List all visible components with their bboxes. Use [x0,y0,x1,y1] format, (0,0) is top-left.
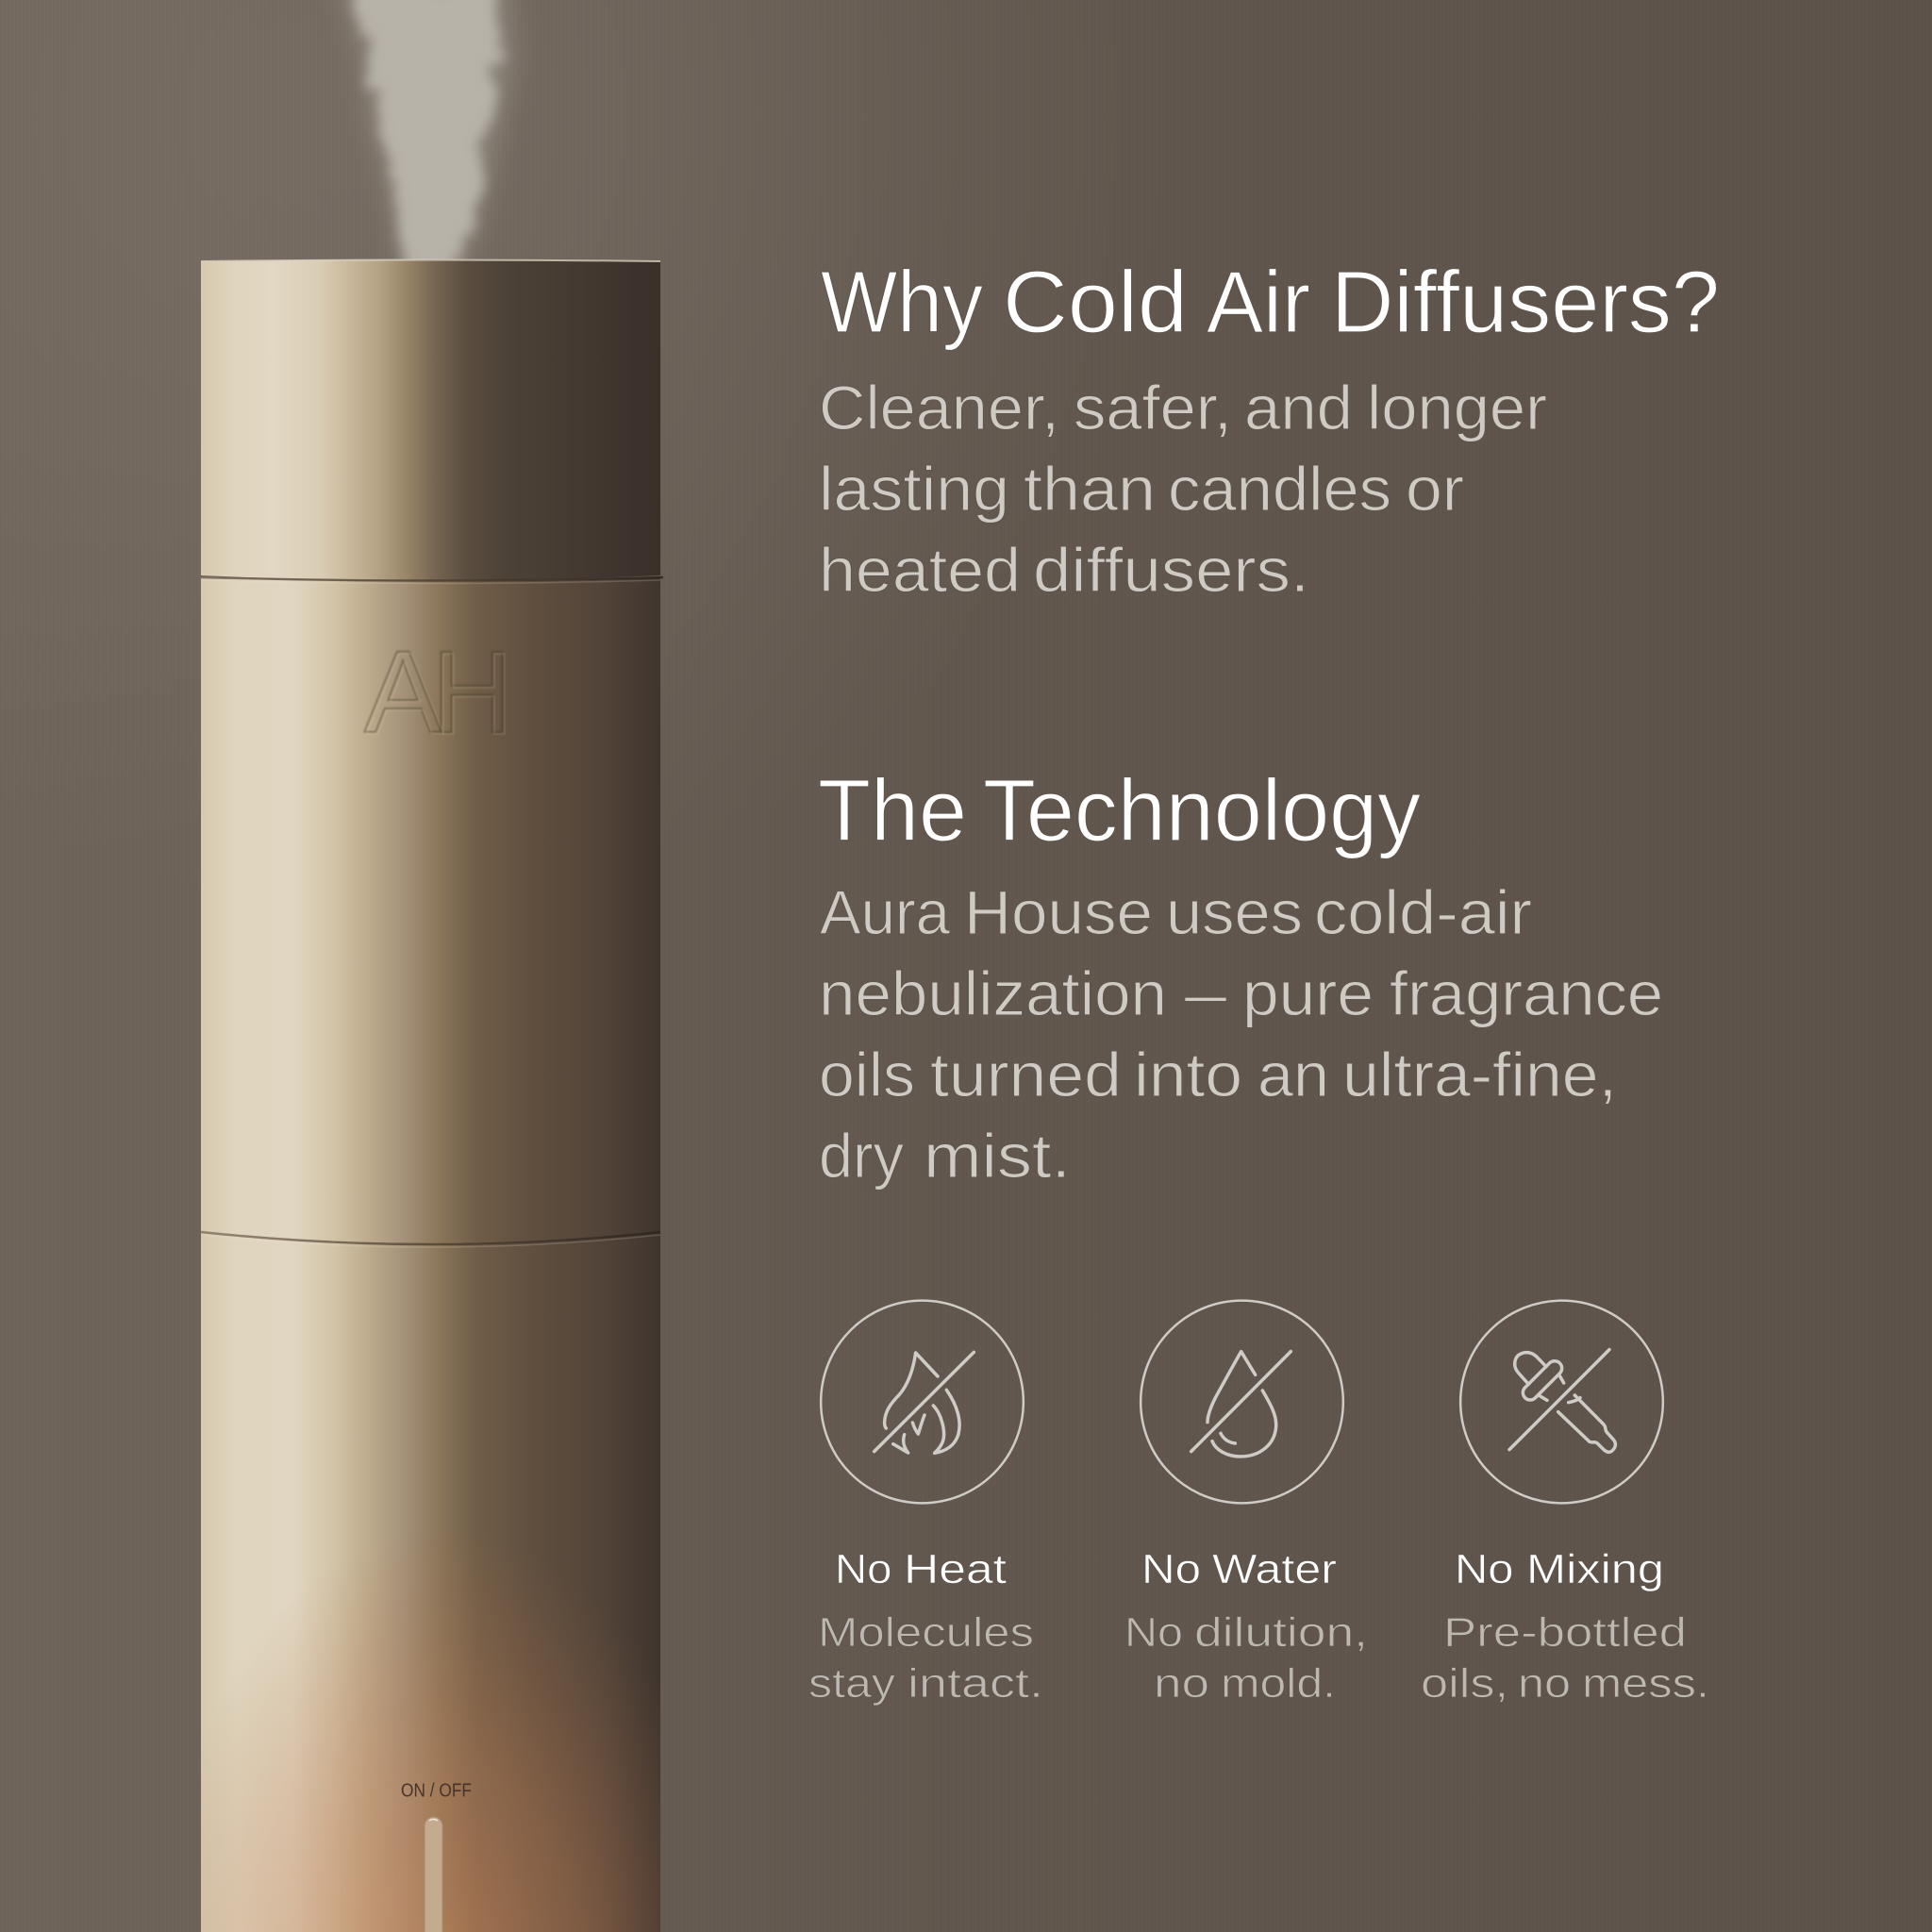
lower seam [201,1232,660,1247]
text block: why cold air: longer [1367,373,1547,442]
text block: why cold air [819,373,1547,605]
heading: why cold air diffusers: Why [821,253,983,351]
text block: technology: mist. [924,1121,1071,1191]
icon: crossed-out flame [821,1301,1024,1503]
warm glow at base [201,1608,660,1932]
heading: why cold air diffusers: Air [1207,253,1310,351]
text block: technology: ultra-fine, [1342,1040,1617,1109]
text block: technology [819,877,1663,1191]
embossed AH logo [364,628,513,759]
label: no water: Water [1212,1546,1337,1592]
heading: why cold air diffusers: Diffusers? [1331,253,1720,351]
text block: technology: oils [819,1040,915,1109]
upper seam [201,577,663,583]
text block: technology: — [1185,958,1226,1028]
text block: technology: fragrance [1390,958,1663,1028]
text block: why cold air: or [1406,454,1464,524]
text block: technology: uses [1166,877,1303,947]
description: no heat: intact. [908,1660,1043,1707]
heading: the technology: The [818,761,967,859]
cylinder bottom section [201,1230,660,1932]
icon: crossed-out water drop [1141,1301,1343,1503]
label: no water [1141,1546,1337,1592]
text block: technology: dry [819,1121,904,1191]
description: no mixing: Pre-bottled [1443,1609,1687,1656]
top rim highlight [201,260,660,261]
label: no heat: No [835,1546,892,1592]
text block: technology: turned [930,1040,1122,1109]
text block: why cold air: than [1024,454,1156,524]
text block: why cold air: candles [1168,454,1391,524]
label: no heat: Heat [904,1546,1007,1592]
text block: technology: an [1257,1040,1329,1109]
text block: technology: into [1134,1040,1242,1109]
description: no water: mold. [1221,1660,1336,1707]
feature: no mixing [1421,1301,1709,1707]
icon: crossed-out dropper [1460,1301,1663,1503]
description: no mixing: oils, [1421,1660,1508,1707]
text block: technology: House [964,877,1153,947]
cylinder top section [201,259,660,581]
text block: technology: nebulization [819,958,1167,1028]
on/off label: ON / OFF [401,1781,472,1802]
embossed AH logo: A [366,630,443,759]
heading: why cold air diffusers: Cold [1003,253,1188,351]
description: no water: No [1124,1609,1183,1656]
embossed AH logo: H [434,630,513,759]
text block: why cold air: diffusers. [1033,535,1309,605]
description: no heat: Molecules [818,1609,1034,1656]
label: no mixing [1455,1546,1664,1592]
text block: why cold air: safer, [1074,373,1232,442]
description: no heat [808,1609,1043,1707]
heading: the technology: Technology [983,761,1421,859]
slider switch [425,1817,442,1932]
text block: why cold air: Cleaner, [819,373,1059,442]
description: no water: no [1154,1660,1209,1707]
text block: why cold air: heated [819,535,1021,605]
label: no water: No [1141,1546,1201,1592]
text block: technology: cold-air [1314,877,1532,947]
cylinder middle section [201,577,660,1244]
label: no mixing: No [1455,1546,1513,1592]
embossed AH logo: H [432,628,511,758]
label: no heat [835,1546,1007,1592]
description: no water: dilution, [1194,1609,1368,1656]
description: no mixing [1421,1609,1709,1707]
text block: technology: pure [1242,958,1374,1028]
mist plume rising from diffuser [340,0,515,274]
description: no heat: stay [808,1660,895,1707]
embossed AH logo: A [364,628,441,758]
description: no mixing: no [1518,1660,1571,1707]
text block: why cold air: and [1244,373,1353,442]
feature: no heat [808,1301,1043,1707]
text block: why cold air: lasting [819,454,1009,524]
description: no mixing: mess. [1582,1660,1709,1707]
heading: why cold air diffusers [821,253,1720,351]
label: no mixing: Mixing [1526,1546,1664,1592]
diffuser body [201,259,663,1932]
description: no water [1124,1609,1368,1707]
feature: no water [1124,1301,1368,1707]
text block: technology: Aura [820,877,950,947]
